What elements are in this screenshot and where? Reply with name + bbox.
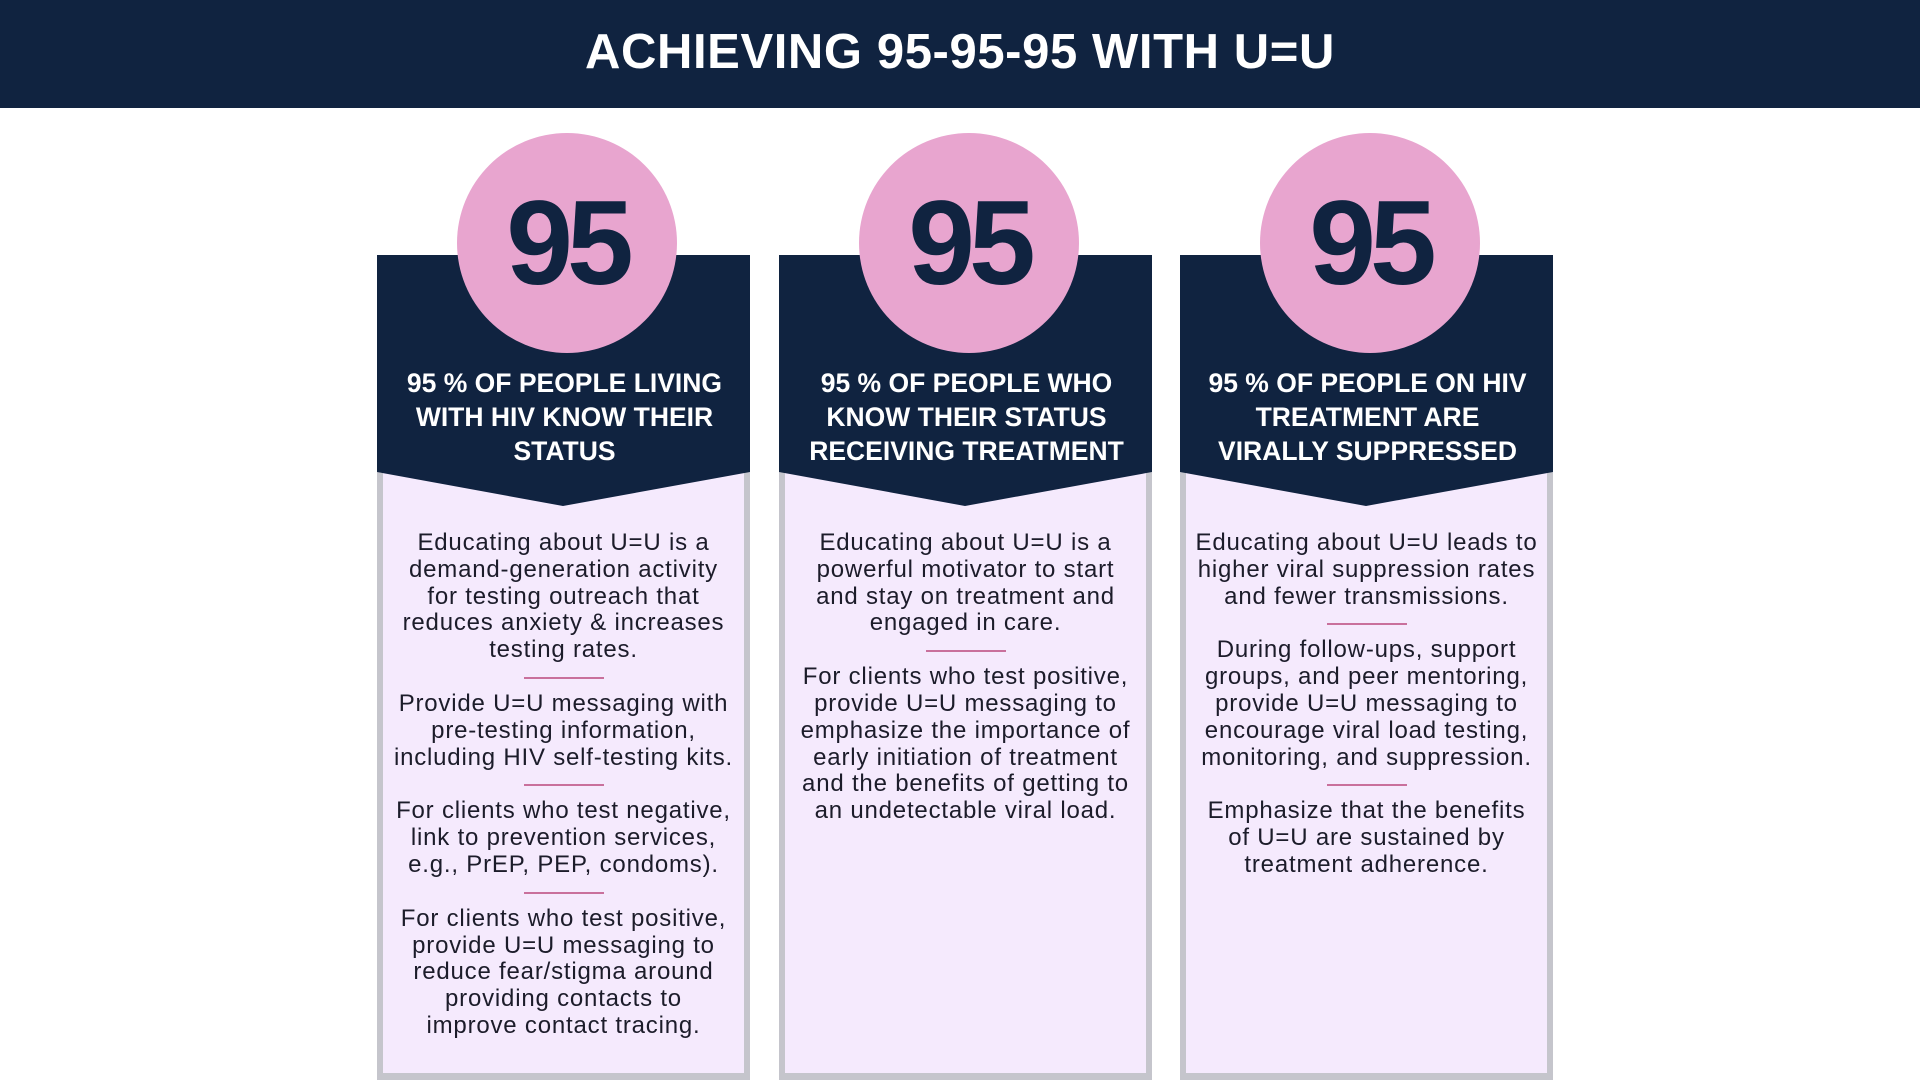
body text: including HIV self-testing kits. [394, 744, 733, 771]
body text: For clients who test positive, [401, 905, 726, 932]
body text: emphasize the importance of [801, 717, 1130, 744]
circle 95 [1260, 133, 1480, 353]
circle 95: 95 [506, 176, 628, 310]
body text: e.g., PrEP, PEP, condoms). [408, 851, 719, 878]
body text: reduces anxiety & increases [403, 609, 724, 636]
heading: KNOW THEIR STATUS [826, 402, 1107, 432]
body text: and the benefits of getting to [802, 770, 1129, 797]
header bar [0, 0, 1920, 108]
body text [801, 529, 1130, 824]
body text: early initiation of treatment [813, 744, 1118, 771]
body text: reduce fear/stigma around [413, 958, 714, 985]
heading [809, 368, 1124, 466]
heading: 95 % OF PEOPLE LIVING [407, 368, 722, 398]
heading: STATUS [513, 436, 616, 466]
circle 95: 95 [1309, 176, 1431, 310]
panel background [377, 255, 750, 1080]
body text: During follow-ups, support [1217, 636, 1516, 663]
body text: testing rates. [489, 636, 638, 663]
panel background [779, 255, 1152, 1080]
body text: and stay on treatment and [816, 583, 1115, 610]
heading: RECEIVING TREATMENT [809, 436, 1124, 466]
panel: receiving treatment [779, 133, 1152, 1080]
heading: 95 % OF PEOPLE ON HIV [1208, 368, 1527, 398]
body text: provide U=U messaging to [814, 690, 1117, 717]
title: ACHIEVING 95-95-95 WITH U=U [585, 25, 1335, 79]
body text: For clients who test negative, [396, 797, 731, 824]
body text: link to prevention services, [411, 824, 716, 851]
body text [1196, 529, 1537, 878]
body text: improve contact tracing. [426, 1012, 700, 1039]
body text: pre-testing information, [431, 717, 696, 744]
circle 95: 95 [908, 176, 1030, 310]
body text: provide U=U messaging to [1215, 690, 1518, 717]
heading: TREATMENT ARE [1256, 402, 1479, 432]
body text: encourage viral load testing, [1205, 717, 1528, 744]
body text: Educating about U=U leads to [1196, 529, 1537, 556]
panel: know status [377, 133, 750, 1080]
body text: of U=U are sustained by [1228, 824, 1505, 851]
body text: Provide U=U messaging with [399, 690, 728, 717]
body text: Educating about U=U is a [417, 529, 710, 556]
heading: WITH HIV KNOW THEIR [416, 402, 713, 432]
body text: powerful motivator to start [817, 556, 1114, 583]
heading: 95 % OF PEOPLE WHO [821, 368, 1112, 398]
body text: provide U=U messaging to [412, 932, 715, 959]
circle 95 [457, 133, 677, 353]
body text: For clients who test positive, [803, 663, 1128, 690]
body text: providing contacts to [445, 985, 682, 1012]
heading [407, 368, 722, 466]
body text: higher viral suppression rates [1198, 556, 1535, 583]
circle 95 [859, 133, 1079, 353]
body text: treatment adherence. [1244, 851, 1489, 878]
heading: VIRALLY SUPPRESSED [1218, 436, 1517, 466]
panel background [1180, 255, 1553, 1080]
body text: demand-generation activity [409, 556, 718, 583]
heading [1208, 368, 1527, 466]
body text: monitoring, and suppression. [1201, 744, 1532, 771]
body text: groups, and peer mentoring, [1205, 663, 1528, 690]
body text: engaged in care. [870, 609, 1061, 636]
body text: an undetectable viral load. [815, 797, 1116, 824]
body text: Emphasize that the benefits [1208, 797, 1525, 824]
body text [394, 529, 733, 1039]
body text: Educating about U=U is a [819, 529, 1112, 556]
body text: for testing outreach that [427, 583, 700, 610]
panel: virally suppressed [1180, 133, 1553, 1080]
body text: and fewer transmissions. [1224, 583, 1509, 610]
